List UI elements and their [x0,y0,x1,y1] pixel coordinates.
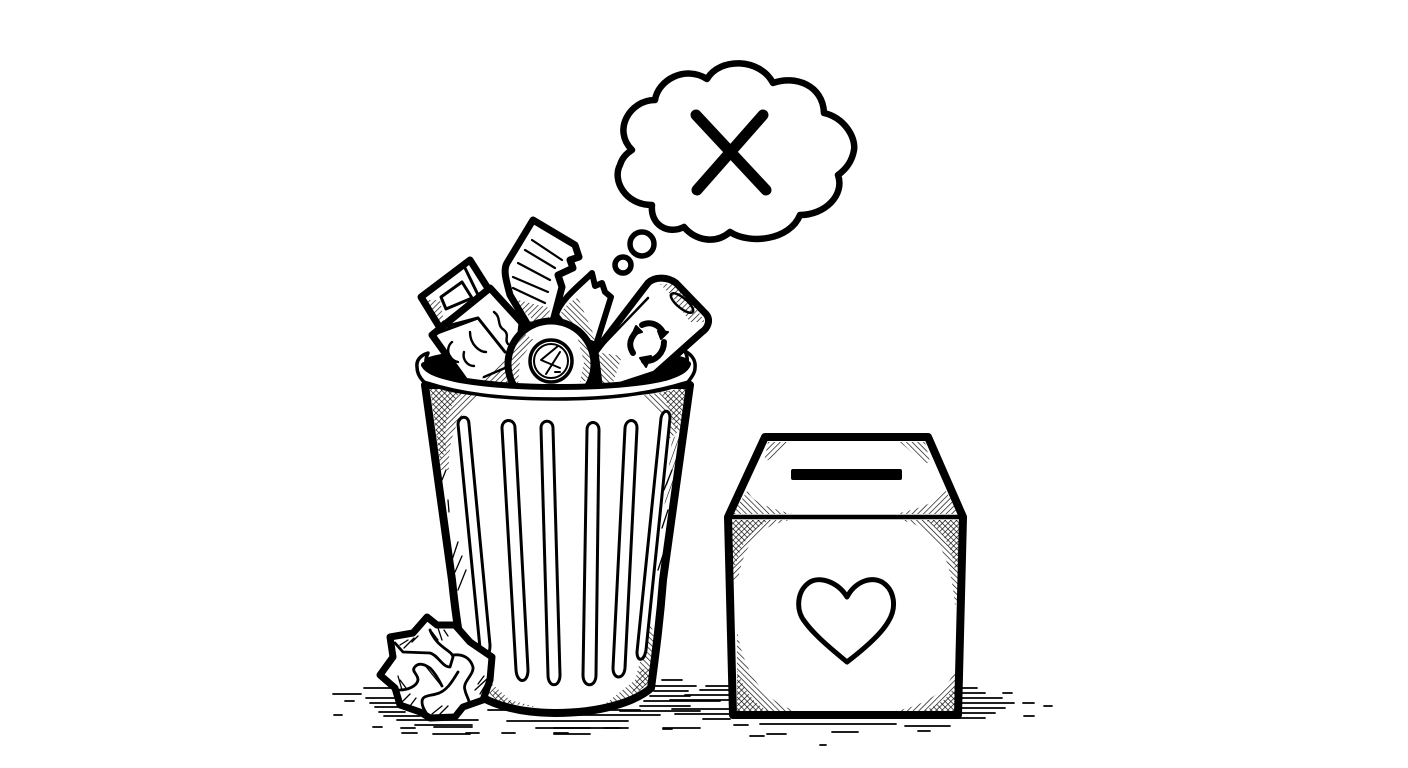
can body [425,385,690,713]
heart icon [799,580,894,662]
coin slot [791,469,902,480]
thought bubble [618,63,854,240]
milk carton [421,260,522,388]
bottle cap ball [504,318,594,384]
box lid and body [728,437,963,715]
rim inner shadow line [424,364,688,387]
body hatching [430,388,686,708]
back of rim [418,350,694,396]
body ribs [458,411,670,685]
ground shading lines [333,680,1052,745]
X mark in thought bubble [696,115,766,190]
recycling canister [595,278,709,392]
crumpled note paper [505,220,579,325]
illustration: trash can beside donation box [332,60,1053,746]
trash items [421,220,709,407]
front of rim [417,351,695,399]
crumpled paper ball [380,617,492,718]
recycling symbol [630,323,668,367]
trash can [380,63,963,718]
torn wrapper scrap [556,273,611,345]
donation box [728,437,963,715]
thought bubble trail [615,232,654,273]
box hatching [732,442,960,712]
